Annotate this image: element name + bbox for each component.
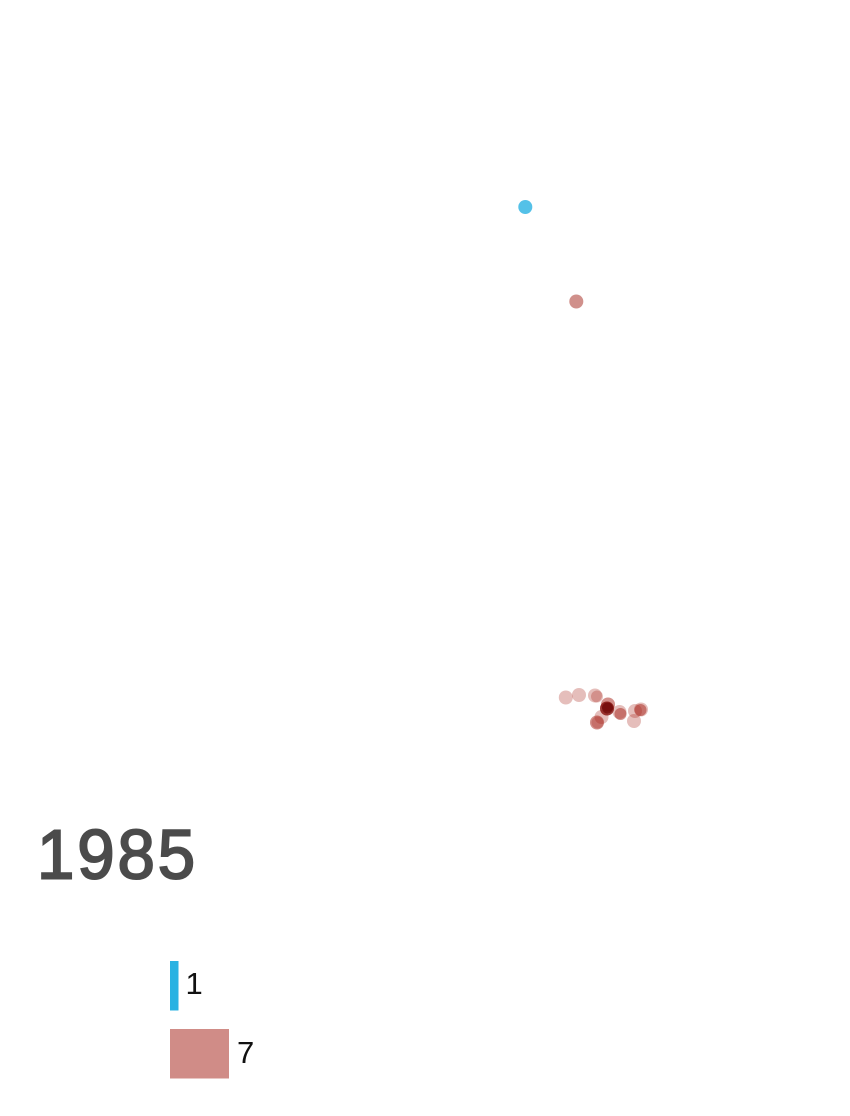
legend: blue count: 1	[186, 966, 203, 1001]
year label: 1985	[37, 815, 198, 894]
legend: red count: 7	[237, 1035, 254, 1070]
legend: red count	[170, 1029, 254, 1078]
legend: blue count	[170, 961, 203, 1010]
red dot north	[569, 294, 583, 308]
blue dot	[518, 200, 532, 214]
red dot cluster south	[559, 688, 648, 730]
